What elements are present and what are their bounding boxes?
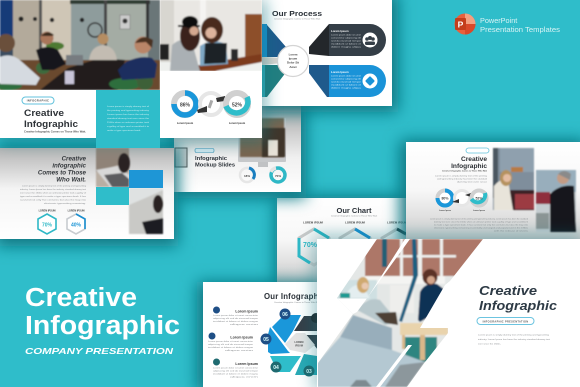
donut 52 percent: 52%	[232, 102, 243, 108]
process heading: Our Process	[272, 9, 322, 18]
monitor mockup	[238, 118, 286, 167]
paragraph: electronic typesetting remaining.	[44, 202, 87, 205]
hexagon 70 percent: 70%	[42, 222, 53, 228]
teal text panel: make a type specimen book.	[107, 129, 142, 132]
hexagon cycle diagram	[268, 315, 317, 375]
donut 80 percent: Lorem Ipsum	[439, 210, 451, 212]
hexagon cycle diagram: LOREM	[294, 341, 304, 344]
infographic subtitle: Creative Infographic Comes to Those Who Wait	[274, 301, 321, 304]
number badges: 06	[282, 312, 288, 318]
photo: two women with laptop	[160, 0, 262, 71]
chart subtitle: Creative Infographic Comes to Those Who Wait	[331, 214, 377, 218]
italic heading	[38, 156, 87, 184]
donut 80 percent	[438, 190, 453, 212]
icon: PowerPoint logo	[454, 14, 476, 34]
mockup heading	[195, 156, 235, 168]
dark process arm: dolore magna aliqua	[331, 46, 362, 48]
bottom paragraph: with the release of sheets	[494, 230, 529, 232]
panel: hexagon infographic slide	[197, 282, 330, 387]
paragraph: ever since the 1500s when an unknown printer took a galley of	[20, 192, 86, 194]
PowerPoint templates label: Presentation Templates	[480, 25, 560, 34]
teal text panel: the printing and typesetting industry	[107, 109, 149, 112]
cover paragraph: ever since the 1500s.	[478, 342, 501, 346]
list item 01: adipiscing elit sed do eiusmod tempor	[213, 317, 258, 320]
list item 03: Lorem ipsum dolor sit amet consectetur	[213, 366, 258, 370]
hexagon 70 percent: LOREM IPSUM	[39, 210, 55, 212]
white diagonal stripes	[337, 239, 410, 314]
title	[451, 156, 487, 170]
icon: PowerPoint logo: P	[458, 20, 464, 30]
cover paragraph: industry. Lorem Ipsum has been the industry standard dummy text	[478, 338, 550, 341]
slide title: Infographic	[24, 119, 78, 130]
teal text panel: standard dummy text ever since the	[107, 117, 150, 120]
panel: process slide	[258, 0, 398, 112]
photo collage	[96, 148, 163, 234]
donut small 18 percent: 18%	[244, 174, 250, 178]
list item 02	[208, 332, 254, 352]
list item 03: adipiscing elit sed do eiusmod tempor	[213, 370, 258, 372]
photo: woman on sofa	[493, 148, 534, 210]
hexagon 40 percent	[67, 210, 85, 234]
donut 80 percent: 80%	[441, 196, 449, 200]
dark process arm: Lorem Ipsum	[331, 29, 349, 33]
donut 86 percent: Lorem Ipsum	[177, 121, 194, 125]
hexagon 40 percent: 40%	[71, 222, 82, 228]
paragraph	[435, 174, 488, 184]
donut 52 percent	[472, 190, 486, 212]
hexagon cycle diagram: IPSUM	[295, 344, 303, 348]
italic heading: Who Wait.	[56, 176, 86, 184]
donut 52 percent: Lorem Ipsum	[473, 210, 485, 212]
left teal arm	[262, 65, 287, 97]
blue process arm: Lorem ipsum dolor sit amet	[331, 74, 362, 78]
list item 01: Lorem ipsum dolor sit amet consectetur	[213, 314, 258, 317]
pill label	[195, 148, 214, 152]
slide subtitle: Creative Infographic Comes on Those Who Wait.	[24, 130, 86, 134]
hexagon 40 percent: LOREM IPSUM	[68, 210, 84, 212]
framed picture	[175, 148, 187, 167]
cover title: Infographic	[479, 298, 558, 313]
teal text panel: Lorem ipsum is simply dummy text of	[107, 105, 150, 108]
panel: chart slide	[275, 196, 412, 288]
panel: creative slide with hexagons	[0, 146, 178, 246]
mockup heading: Infographic	[195, 156, 227, 162]
donut 52 percent	[226, 93, 248, 125]
centre circle: Ipsum	[289, 56, 298, 60]
blue process arm: Lorem Ipsum	[331, 70, 349, 74]
main title: Infographic	[25, 312, 180, 340]
blue process arm: incididunt ut labore et	[331, 84, 362, 86]
bottom paragraph: electronic typesetting remaining essentially unchanged and popularised in the 1960s	[434, 226, 529, 230]
pill label	[466, 148, 489, 153]
centre circle: Amet	[289, 65, 297, 69]
dark process arm: Lorem ipsum dolor sit amet	[331, 34, 362, 36]
panel: cover slide with diagonal photo	[313, 235, 580, 387]
panel: team meeting slide	[0, 0, 266, 148]
paragraph: Lorem ipsum is simply dummy text of the printing	[435, 174, 488, 178]
list item 03	[213, 358, 259, 378]
main title: Creative	[25, 284, 137, 312]
process subtitle: Creative Infographic Comes to Those Who Wait	[274, 18, 321, 20]
italic heading: Comes to Those	[38, 170, 87, 176]
chart column labels: LOREM IPSUM	[303, 220, 324, 224]
cover paragraph	[478, 334, 550, 346]
slide title	[24, 108, 78, 130]
bottom paragraph: dummy text ever since the 1500s when an unknown printer took a galley of type and scrambled it	[434, 220, 528, 224]
blue process arm: dolore magna aliqua	[331, 88, 362, 90]
mockup heading: Mockup Slides	[195, 162, 235, 168]
paragraph: and typesetting industry has been the standard	[437, 178, 488, 180]
centre circle: Lorem	[289, 52, 298, 56]
pill label	[22, 97, 54, 104]
dark process arm: consectetur adipiscing elit	[331, 36, 362, 40]
slide title: Creative	[24, 108, 64, 119]
chart column labels	[303, 220, 408, 224]
paragraph	[20, 184, 87, 205]
blue process arm: consectetur adipiscing elit	[331, 78, 362, 80]
italic heading: Creative	[62, 156, 87, 162]
list item 02: adipiscing elit sed do eiusmod tempor	[208, 343, 253, 346]
PowerPoint templates label	[480, 16, 560, 34]
infographic heading: Our Infographic	[264, 292, 326, 301]
teal text panel: a galley of type and scrambled it to	[107, 125, 150, 128]
connector strip	[262, 57, 282, 65]
donut small 70 percent: 70%	[275, 174, 281, 178]
photo: man talking	[536, 170, 576, 232]
chart hexagons: 70%	[303, 242, 318, 249]
diagonal photo	[317, 239, 490, 387]
centre circle	[278, 46, 308, 76]
paragraph: survived not only five centuries but also the leap into	[20, 198, 87, 202]
list item 02: Lorem ipsum dolor sit amet consectetur	[208, 340, 253, 343]
title: Infographic	[451, 163, 487, 170]
chart column labels: LOREM IPSUM	[387, 220, 408, 224]
cover title	[479, 283, 558, 313]
cover pill label: INFOGRAPHIC PRESENTATION	[483, 320, 528, 323]
centre circle: Dolor Sit	[287, 60, 299, 64]
number badges: 03	[306, 369, 312, 375]
paragraph: dummy text ever since	[457, 180, 488, 184]
panel: photo and donut slide	[400, 140, 580, 244]
number badges: 05	[263, 337, 269, 343]
list item 02: incididunt ut labore et dolore magna	[208, 346, 254, 349]
number badges: 04	[273, 365, 279, 371]
list item 03: aliqua enim	[230, 376, 258, 378]
donut 86 percent: 86%	[180, 102, 191, 108]
list item 01: Lorem Ipsum	[235, 310, 258, 314]
paragraph: Lorem ipsum is simply dummy text of the printing and typesetting	[22, 184, 87, 188]
donut 52 percent: 52%	[475, 196, 483, 200]
donut 52 percent: Lorem Ipsum	[229, 121, 246, 125]
bottom paragraph	[430, 218, 529, 232]
panel: mockup slide	[172, 104, 306, 198]
title: Creative	[461, 156, 487, 163]
paragraph: industry. Lorem Ipsum has been the industry standard dummy text	[20, 188, 86, 191]
donut 86 percent	[174, 93, 196, 125]
list item 03: Lorem Ipsum	[235, 362, 258, 366]
list item 01: aliqua enim	[230, 324, 258, 326]
main subtitle: COMPANY PRESENTATION	[25, 346, 174, 356]
subtitle: Creative Infographic Comes to Those Who Wait	[442, 170, 487, 172]
teal text panel	[96, 90, 160, 148]
left blue arm	[262, 24, 286, 57]
dark process arm: sed do eiusmod tempor	[331, 40, 361, 42]
dark process arm: incididunt ut labore et	[331, 42, 362, 46]
number badges	[260, 308, 321, 376]
dark process arm	[309, 24, 386, 56]
chart heading: Our Chart	[336, 206, 372, 215]
bottom paragraph: Lorem ipsum is simply dummy text of the printing and typesetting industry. Lorem ipsum has been the standard	[430, 218, 529, 220]
bottom paragraph: to make a type specimen book. It has survived not only five centuries but also the leap into	[434, 224, 529, 226]
cover paragraph: Lorem ipsum is simply dummy text of the printing and typesetting	[478, 334, 550, 336]
blue process arm	[309, 65, 386, 97]
PowerPoint templates label: PowerPoint	[480, 16, 517, 25]
photo: team meeting	[0, 0, 160, 90]
list item 02: aliqua enim	[225, 350, 253, 352]
blue process arm: sed do eiusmod tempor	[331, 80, 361, 84]
linking ring	[452, 190, 471, 206]
paragraph: type and scrambled it to make a type specimen book. It has	[20, 195, 87, 198]
pill label: INFOGRAPHIC	[27, 99, 49, 103]
cover pill label	[477, 318, 534, 324]
list item 02: Lorem Ipsum	[230, 336, 253, 340]
linking ring with arrows	[197, 93, 225, 115]
italic heading: infographic	[52, 162, 87, 170]
list item 03: incididunt ut labore et dolore magna	[213, 372, 259, 376]
list item 01: incididunt ut labore et dolore magna	[213, 320, 259, 323]
teal text panel: Lorem ipsum has been the industry	[107, 113, 149, 116]
hexagon 70 percent	[38, 210, 56, 234]
main title	[25, 284, 180, 340]
cover title: Creative	[479, 283, 537, 298]
teal text panel: 1500s when an unknown printer took	[107, 121, 149, 124]
chart column labels: LOREM IPSUM	[345, 220, 366, 224]
list item 01	[213, 306, 259, 326]
